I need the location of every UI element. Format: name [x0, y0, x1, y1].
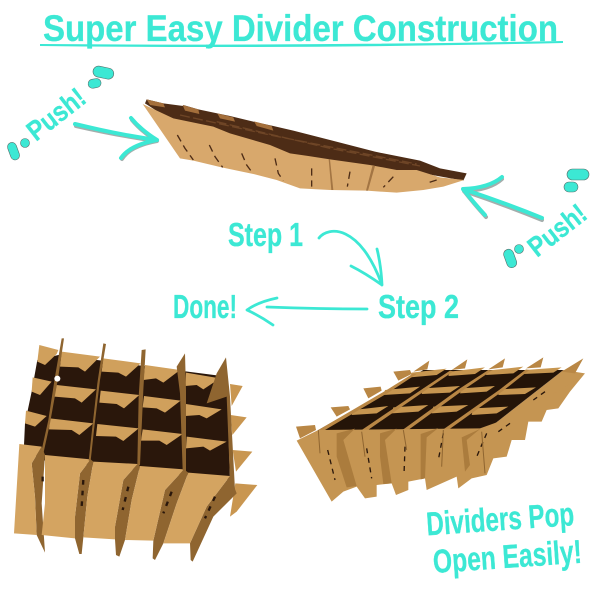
- arrow: push left: [75, 118, 157, 159]
- open divider: front view: [14, 338, 257, 562]
- caption: dividers pop open easily: [425, 495, 583, 580]
- label: push left: Push!: [21, 82, 92, 147]
- front panels of angled view: [297, 373, 585, 502]
- flat collapsed divider: [143, 99, 467, 193]
- label: push right: Push!: [522, 198, 593, 263]
- label: push right: [502, 169, 593, 269]
- label: push left: [6, 65, 115, 161]
- done label: Done!: [173, 288, 237, 325]
- open divider: angled view: [296, 357, 585, 502]
- arrow: step 2 to done: [247, 298, 367, 325]
- step 1 label: Step 1: [228, 216, 303, 253]
- step 2 label: Step 2: [378, 288, 459, 325]
- arrow: step 1 to step 2: [319, 231, 382, 285]
- arrow: push right: [463, 177, 542, 220]
